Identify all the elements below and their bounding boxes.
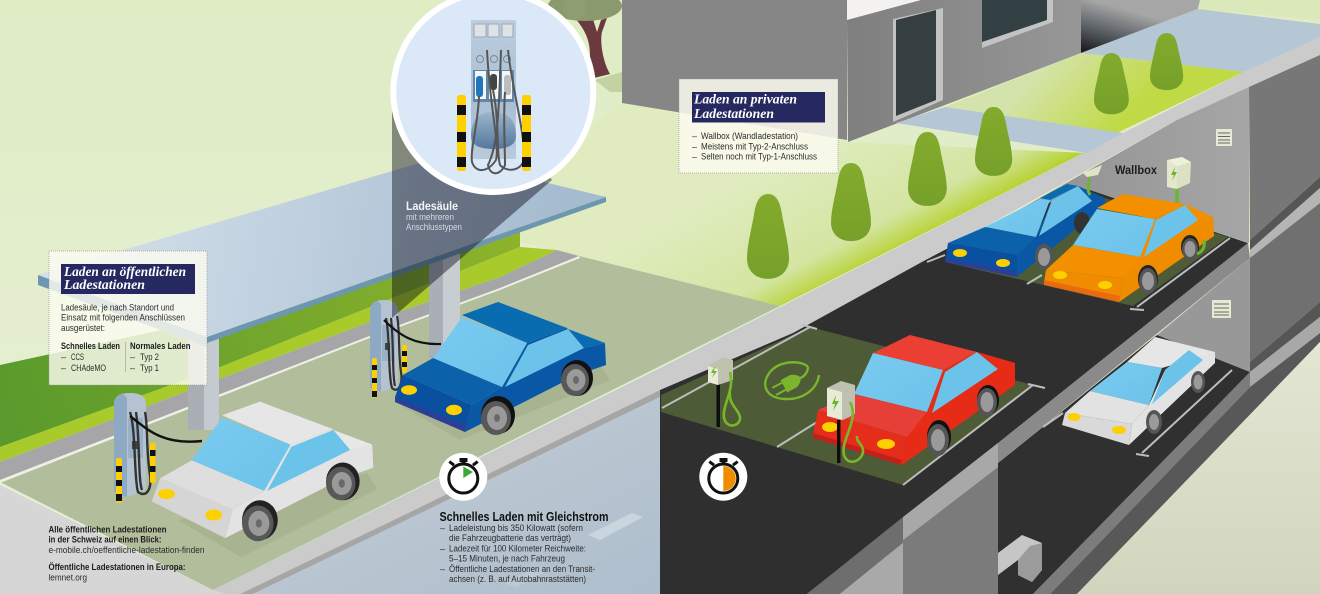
intro text: ausgerüstet: (61, 323, 105, 333)
wallbox on wall (1167, 157, 1191, 203)
hedge (0, 200, 520, 447)
text: fast DC charging: 5–15 Minuten, je nach Fahrzeug (449, 554, 565, 564)
lime verge under hedge (0, 247, 557, 462)
vents (1212, 129, 1232, 318)
post wallbox, left (708, 357, 740, 427)
text: fast DC charging: – (440, 544, 445, 554)
upper deck asphalt (660, 190, 1248, 594)
column: fast charging connectors: CCS (71, 352, 84, 362)
column: fast charging connectors: – (61, 352, 66, 362)
column: fast charging connectors: – (61, 363, 66, 373)
red car (813, 335, 1015, 465)
callout shade cone (392, 100, 552, 318)
text: fast DC charging: Schnelles Laden mit Gleichstrom (440, 510, 608, 524)
column: fast charging connectors (61, 341, 120, 373)
column: normal charging connectors: Typ 1 (140, 363, 159, 373)
text: fast DC charging: – (440, 523, 445, 533)
charging canopy (38, 157, 606, 347)
text: links to public stations: Alle öffentlichen Ladestationen (48, 525, 166, 535)
column (807, 443, 998, 594)
garden paths and lawn (896, 9, 1320, 153)
intro text (61, 303, 185, 333)
private list: Meistens mit Typ-2-Anschluss (701, 142, 808, 152)
column: fast charging connectors: Schnelles Laden (61, 341, 120, 351)
house (622, 0, 1320, 142)
label: Ladesäule: mit mehreren (406, 212, 454, 222)
lower deck (998, 243, 1250, 594)
tree (548, 0, 622, 92)
column: normal charging connectors: Normales Laden (130, 341, 190, 351)
charging post, front (114, 393, 202, 503)
roof pillars (188, 250, 460, 430)
label: Ladesäule: Anschlusstypen (406, 222, 462, 232)
text: fast DC charging: – (440, 564, 445, 574)
private list: – (692, 152, 697, 162)
stopwatch: fast charging (439, 453, 487, 501)
parking bays (661, 198, 1232, 485)
orange car (1044, 194, 1214, 302)
text: links to public stations: lemnet.org (48, 573, 87, 583)
charging post, rear (370, 300, 441, 398)
private list (692, 131, 817, 162)
heading: public stations (61, 264, 195, 294)
label: Ladesäule (406, 199, 462, 232)
white car, private (1062, 337, 1215, 445)
garage walls (1010, 55, 1320, 594)
panel: public charging stations (49, 251, 207, 385)
column: normal charging connectors: Typ 2 (140, 352, 159, 362)
private list: Selten noch mit Typ-1-Anschluss (701, 152, 817, 162)
text: fast DC charging: Öffentliche Ladestationen an den Transit- (449, 564, 595, 574)
column: normal charging connectors: – (130, 363, 135, 373)
heading: private stations (692, 92, 825, 122)
post wallbox, right (827, 381, 863, 463)
handle (998, 535, 1042, 582)
pavement strip (0, 250, 579, 480)
text: fast DC charging: die Fahrzeugbatterie das verträgt) (449, 533, 571, 543)
text: links to public stations: in der Schweiz auf einen Blick: (48, 535, 162, 545)
detail circle: Ladesäule (393, 0, 593, 192)
intro text: Einsatz mit folgenden Anschlüssen (61, 313, 185, 323)
text: fast DC charging: Ladeleistung bis 350 Kilowatt (sofern (449, 523, 583, 533)
intro text: Ladesäule, je nach Standort und (61, 303, 174, 313)
heading: private stations: Laden an privaten (693, 92, 797, 106)
text: fast DC charging (440, 510, 608, 584)
forecourt (0, 256, 780, 590)
left sidewalk (0, 485, 225, 594)
heading: public stations: Laden an öffentlichen (63, 264, 186, 279)
blue car, private (945, 184, 1105, 277)
text: links to public stations: Öffentliche Ladestationen in Europa: (48, 562, 186, 572)
private list: – (692, 142, 697, 152)
road (253, 397, 660, 594)
hedge bushes (747, 33, 1183, 279)
wallbox behind blue car (1083, 165, 1102, 195)
stopwatch: normal charging (699, 453, 747, 501)
column: normal charging connectors (126, 341, 190, 373)
lawn behind forecourt (520, 103, 1123, 306)
label: Ladesäule: Ladesäule (406, 199, 458, 213)
heading: private stations: Ladestationen (693, 106, 774, 121)
text: fast DC charging: Ladezeit für 100 Kilometer Reichweite: (449, 544, 586, 554)
label: Wallbox: Wallbox (1115, 163, 1157, 177)
text: links to public stations: e-mobile.ch/oeffentliche-ladestation-finden (48, 545, 204, 555)
kerb (213, 37, 1320, 594)
column: fast charging connectors: CHAdeMO (71, 363, 106, 373)
panel: private charging stations (679, 79, 838, 173)
blue car, public station (395, 302, 610, 440)
private list: Wallbox (Wandladestation) (701, 131, 798, 141)
private list: – (692, 131, 697, 141)
text: links to public stations (48, 525, 204, 583)
heading: public stations: Ladestationen (63, 277, 145, 292)
white car, public station (152, 402, 378, 557)
column: normal charging connectors: – (130, 352, 135, 362)
text: fast DC charging: achsen (z. B. auf Autobahnraststätten) (449, 574, 586, 584)
plug icon (765, 362, 819, 399)
